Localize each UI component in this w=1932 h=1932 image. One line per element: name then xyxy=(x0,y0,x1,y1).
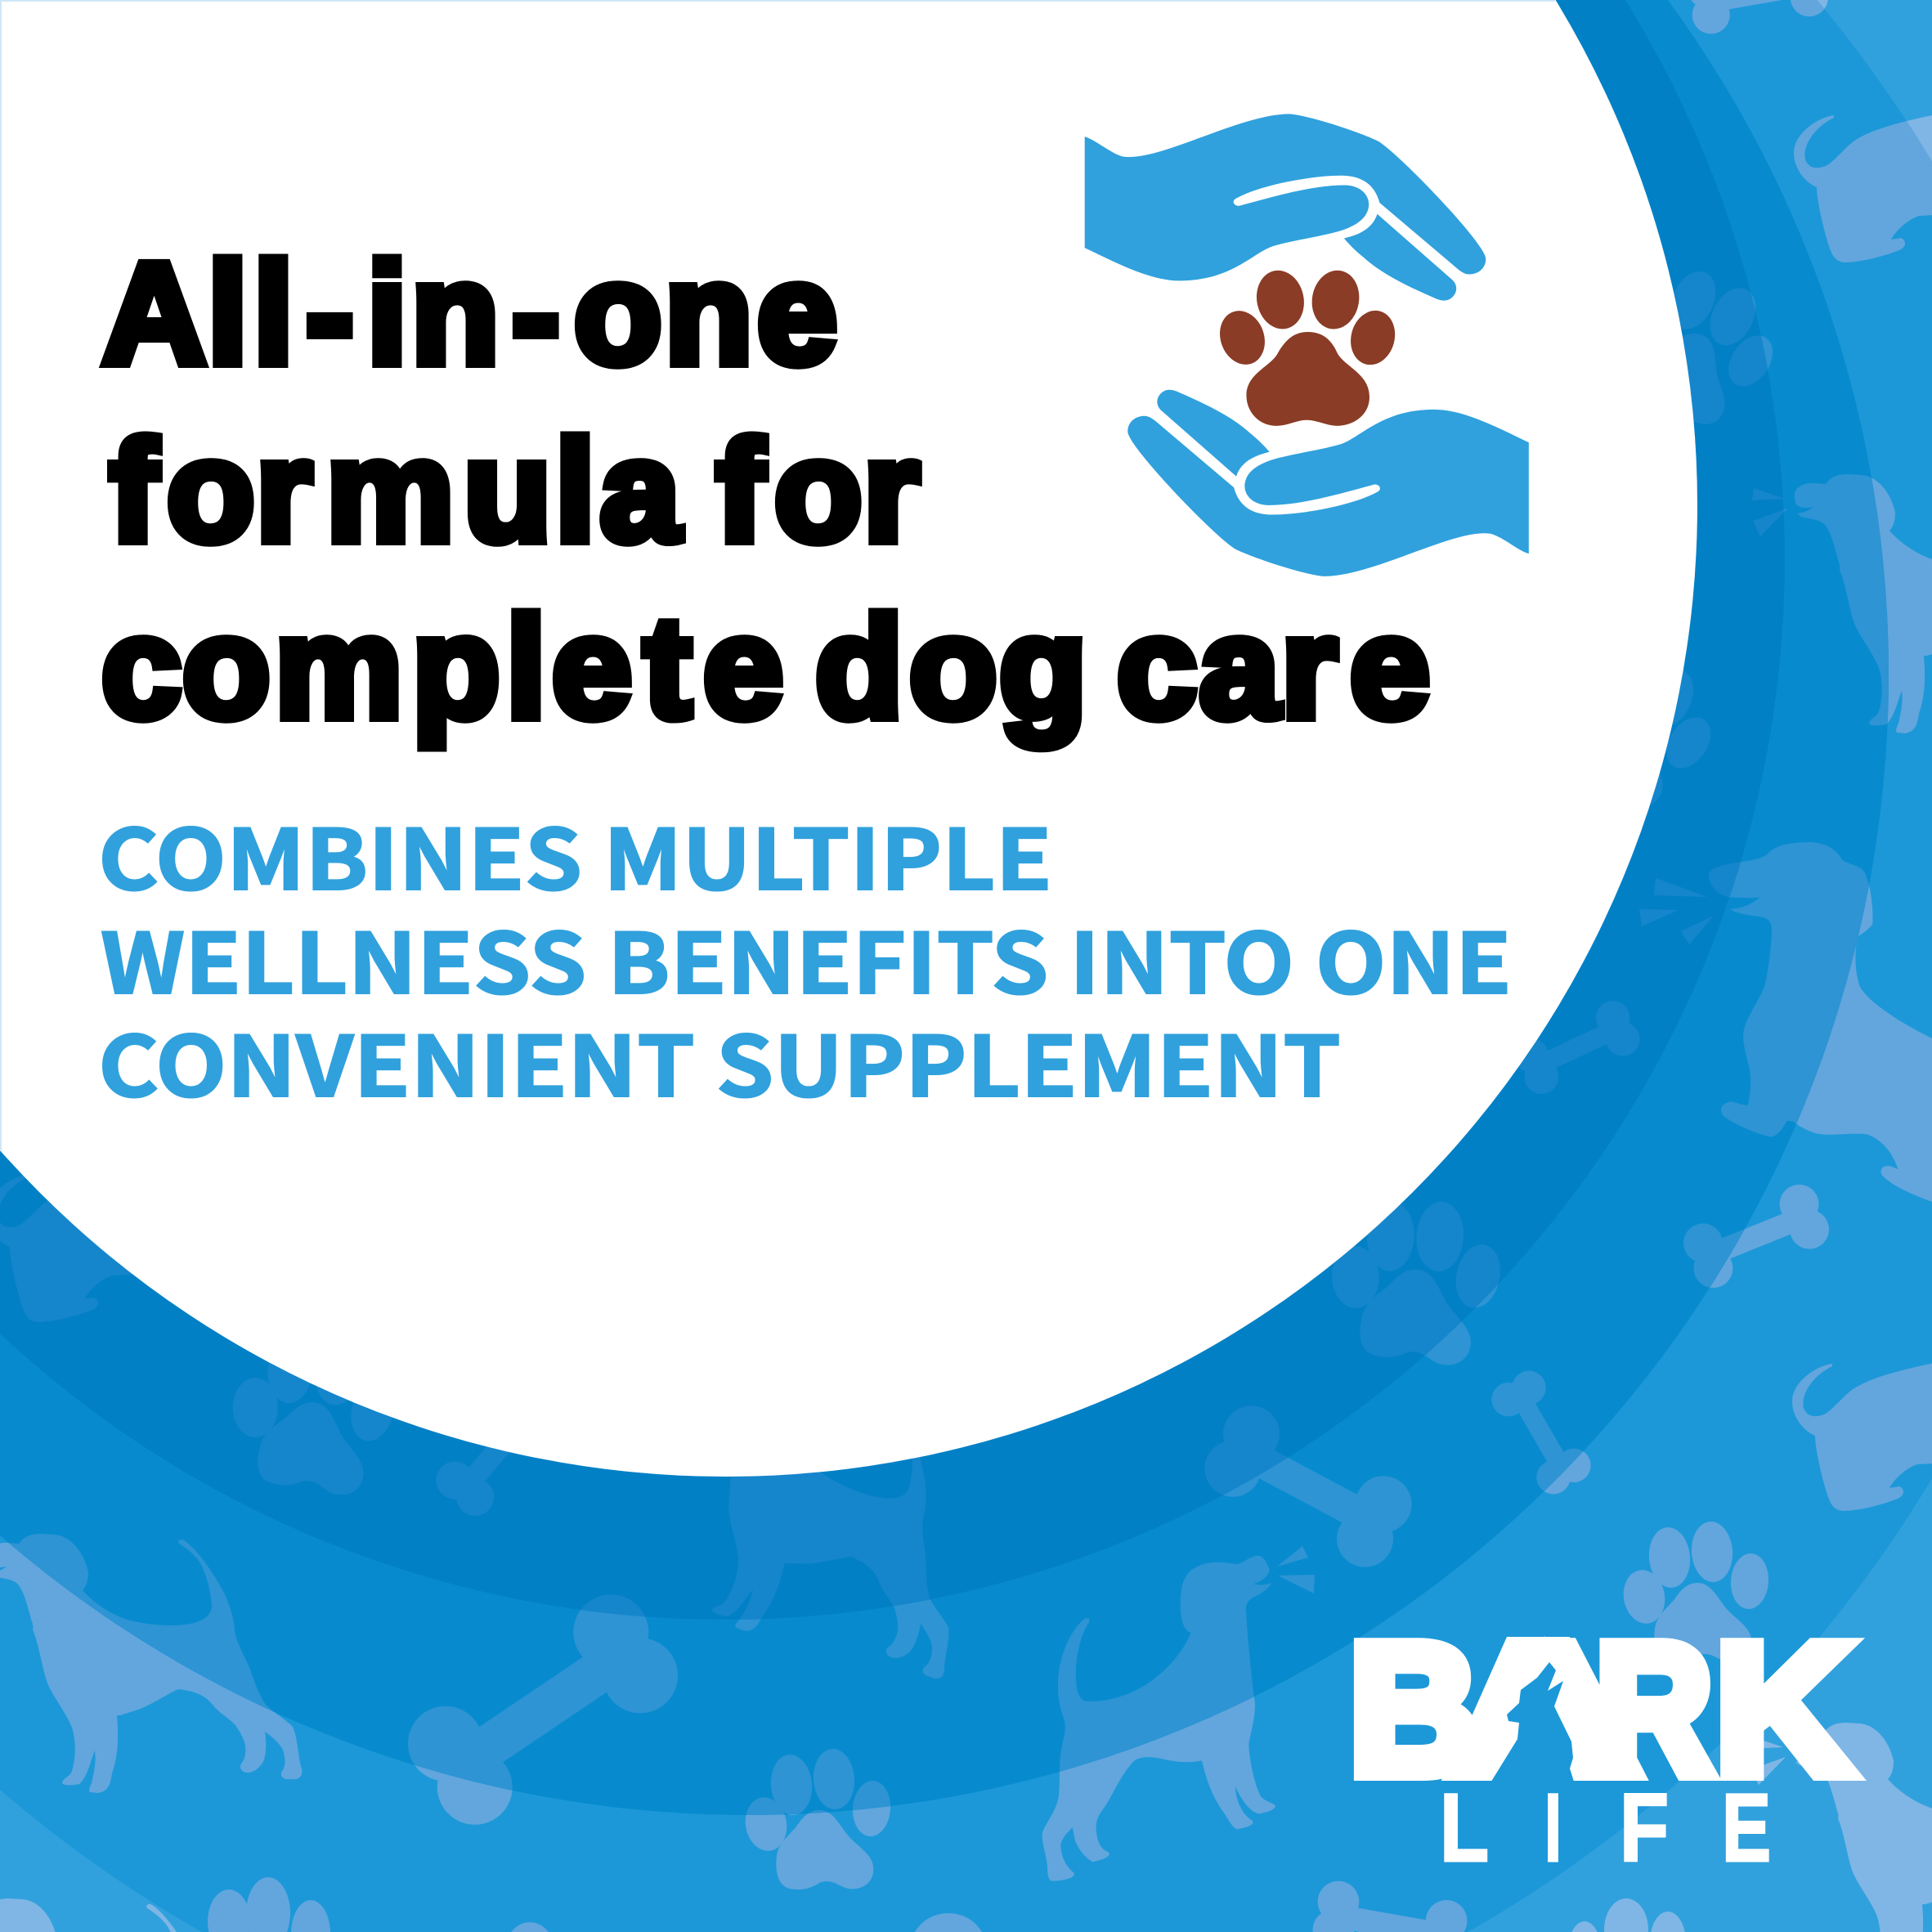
heading xyxy=(101,234,1430,748)
heading: complete dog care xyxy=(101,588,1430,748)
heading: All-in-one xyxy=(102,234,837,394)
logo word BARK: B xyxy=(1350,1606,1478,1812)
logo word LIFE xyxy=(1440,1774,1771,1882)
logo word LIFE: F xyxy=(1620,1774,1669,1882)
logo word BARK: K xyxy=(1716,1606,1851,1812)
subheading: WELLNESS BENEFITS INTO ONE xyxy=(101,898,1512,1018)
logo word LIFE: I xyxy=(1544,1774,1562,1882)
icon: hands cradling paw xyxy=(1085,114,1529,576)
logo word BARK: A xyxy=(1451,1606,1639,1812)
subheading: CONVENIENT SUPPLEMENT xyxy=(98,1001,1341,1121)
inner ring xyxy=(0,0,1785,1620)
lower hand xyxy=(1127,390,1529,576)
white circle panel xyxy=(0,0,1697,1477)
logo word LIFE: L xyxy=(1440,1774,1489,1882)
logo word LIFE: E xyxy=(1722,1774,1771,1882)
heading: formula for xyxy=(110,411,919,572)
logo word BARK xyxy=(1354,1636,1867,1781)
logo word BARK: R xyxy=(1596,1606,1712,1812)
subheading: COMBINES MULTIPLE xyxy=(98,794,1052,914)
logo: BARK LIFE xyxy=(1354,1636,1867,1863)
subheading xyxy=(98,794,1512,1121)
upper hand xyxy=(1085,114,1486,301)
brown paw xyxy=(1213,266,1401,426)
